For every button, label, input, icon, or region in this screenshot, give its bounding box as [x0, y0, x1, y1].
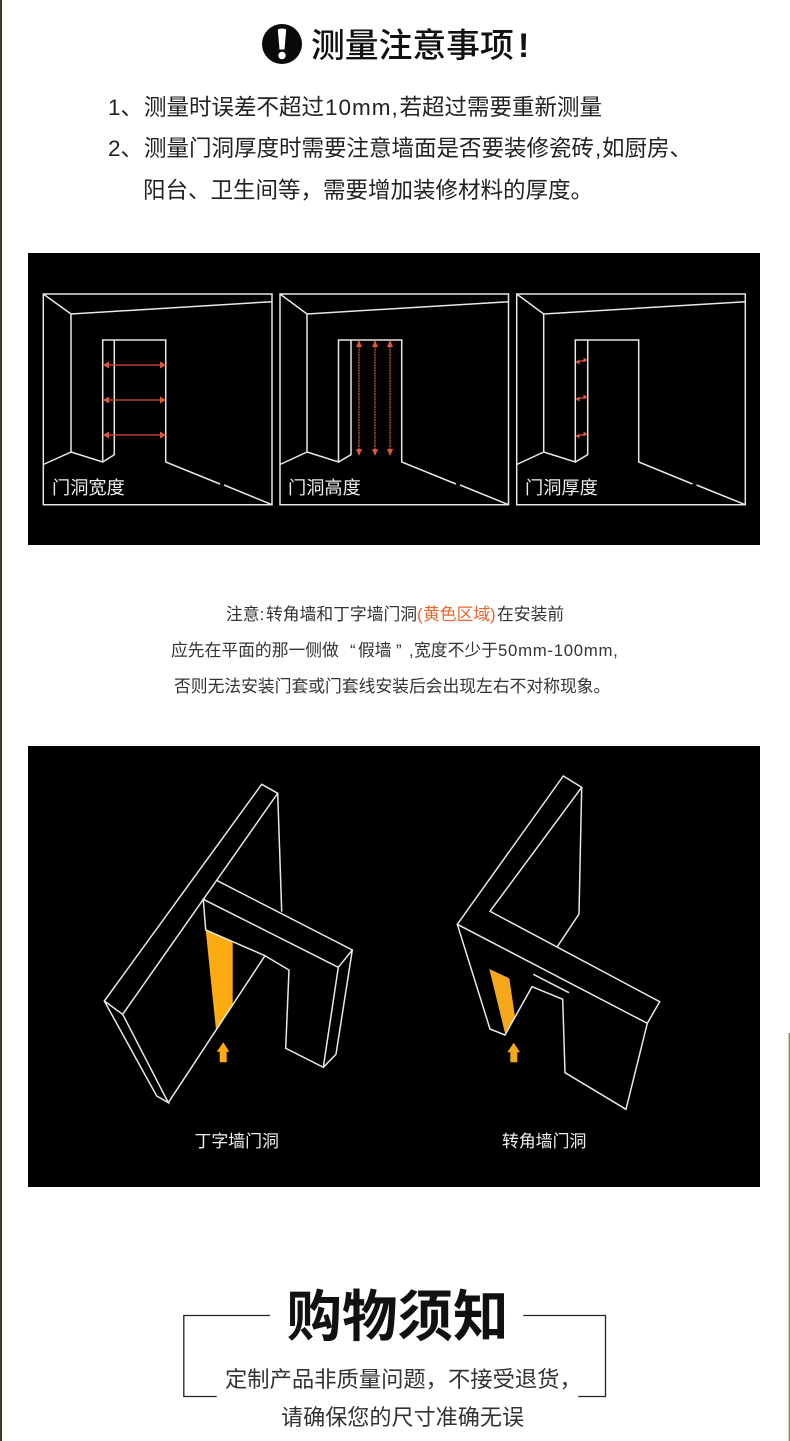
measurement notes: 测量门洞厚度时需要注意墙面是否要装修瓷砖	[144, 136, 594, 161]
shopping notice text	[225, 1367, 582, 1430]
installation note: 在安装前	[497, 605, 564, 624]
diagram: door height	[280, 294, 508, 505]
diagram: door height: 门洞高度	[288, 478, 361, 498]
shopping notice text: 请确保您的尺寸准确无误	[281, 1405, 524, 1430]
diagram: door width	[43, 294, 272, 505]
installation note: 宽度不少于	[414, 641, 498, 660]
diagram: door thickness	[517, 294, 745, 505]
installation note: (	[417, 605, 423, 624]
measurement notes: 10mm,	[325, 95, 399, 120]
installation note: )	[490, 605, 496, 624]
measurement notes	[108, 95, 692, 203]
installation note: 转角墙和丁字墙门洞	[266, 605, 417, 624]
installation note: 50mm-100mm,	[498, 641, 619, 660]
measurement notes: 若超过需要重新测量	[400, 95, 602, 120]
measurement notes: 阳台、卫生间等，需要增加装修材料的厚度。	[143, 178, 593, 203]
diagram: corner wall opening	[457, 776, 660, 1151]
measurement notes: 测量时误差不超过	[144, 95, 324, 120]
installation note: ,	[409, 641, 414, 660]
title: 测量注意事项	[311, 27, 514, 65]
diagram: door thickness: 门洞厚度	[525, 478, 598, 498]
measurement notes: 如厨房、	[602, 136, 692, 161]
diagram: corner wall opening: 转角墙门洞	[502, 1132, 586, 1151]
measurement notes: 1、	[108, 95, 143, 120]
installation note: 黄色区域	[423, 605, 490, 624]
heading: shopping notice: 购物须知	[286, 1286, 509, 1348]
diagram: T-shaped wall opening	[104, 784, 352, 1151]
installation note: 否则无法安装门套或门套线安装后会出现左右不对称现象。	[174, 677, 610, 696]
panel: wall types	[28, 746, 760, 1187]
bracket frame	[184, 1316, 606, 1396]
measurement notes: ,	[595, 136, 601, 161]
measurement notes: 2、	[108, 136, 143, 161]
shopping notice text: 定制产品非质量问题，不接受退货，	[225, 1367, 582, 1392]
installation note: 注意:	[226, 605, 264, 624]
panel: door opening measurements	[28, 253, 760, 545]
diagram: T-shaped wall opening: 丁字墙门洞	[194, 1132, 279, 1151]
installation note: “	[350, 641, 356, 660]
title: !	[518, 27, 529, 65]
warning icon	[262, 24, 302, 64]
installation note: 应先在平面的那一侧做	[171, 641, 339, 660]
diagram: door width: 门洞宽度	[52, 478, 125, 498]
installation note	[171, 605, 619, 696]
installation note: 假墙	[358, 641, 392, 660]
installation note: ”	[396, 641, 402, 660]
